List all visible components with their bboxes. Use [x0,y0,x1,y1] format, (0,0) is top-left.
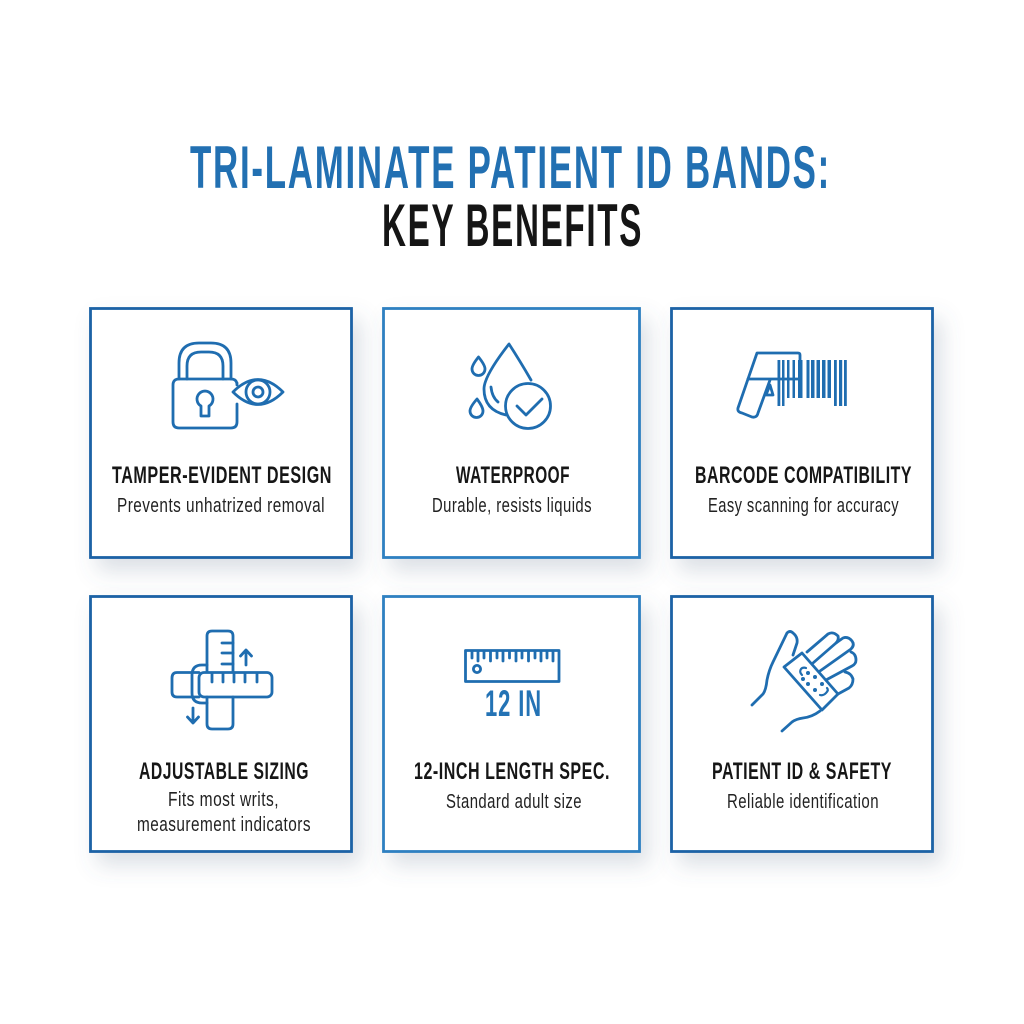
description: fits most wrists: measurement indicators [137,814,311,836]
heading: barcode compatibility: BARCODE COMPATIBILITY [695,462,912,489]
panel: patient id and safety [672,596,932,852]
icon: padlock with eye [173,343,283,428]
description: fits most wrists [137,789,311,836]
label: 12 in: 12 IN [485,683,542,724]
panel: tamper-evident design [90,308,352,558]
panel: waterproof [384,308,640,558]
title: KEY BENEFITS [382,192,643,259]
heading: tamper-evident design: TAMPER-EVIDENT DESIGN [112,462,332,489]
title [190,134,831,259]
heading: patient id and safety: PATIENT ID & SAFETY [712,758,892,785]
panel: adjustable sizing [90,596,352,852]
icon: hand with wristband [752,632,856,731]
panel: 12-inch length spec [384,596,640,852]
description: reliable identification: Reliable identification [727,791,879,813]
heading: 12-inch length spec: 12-INCH LENGTH SPEC. [414,758,610,785]
icon: water drops with check [470,344,550,428]
description: fits most wrists: Fits most writs, [168,789,279,811]
icon: ruler [466,650,559,682]
icon: barcode scanner [738,353,847,417]
icon: crossed rulers with arrows [172,631,272,729]
heading: adjustable sizing: ADJUSTABLE SIZING [139,758,309,785]
panel: barcode compatibility [672,308,932,558]
description: prevents removal: Prevents unhatrized removal [117,495,325,517]
description: durable: Durable, resists liquids [432,495,592,517]
description: standard adult size: Standard adult size [446,791,582,813]
description: easy scanning: Easy scanning for accuracy [708,495,899,517]
heading: waterproof: WATERPROOF [456,462,570,489]
